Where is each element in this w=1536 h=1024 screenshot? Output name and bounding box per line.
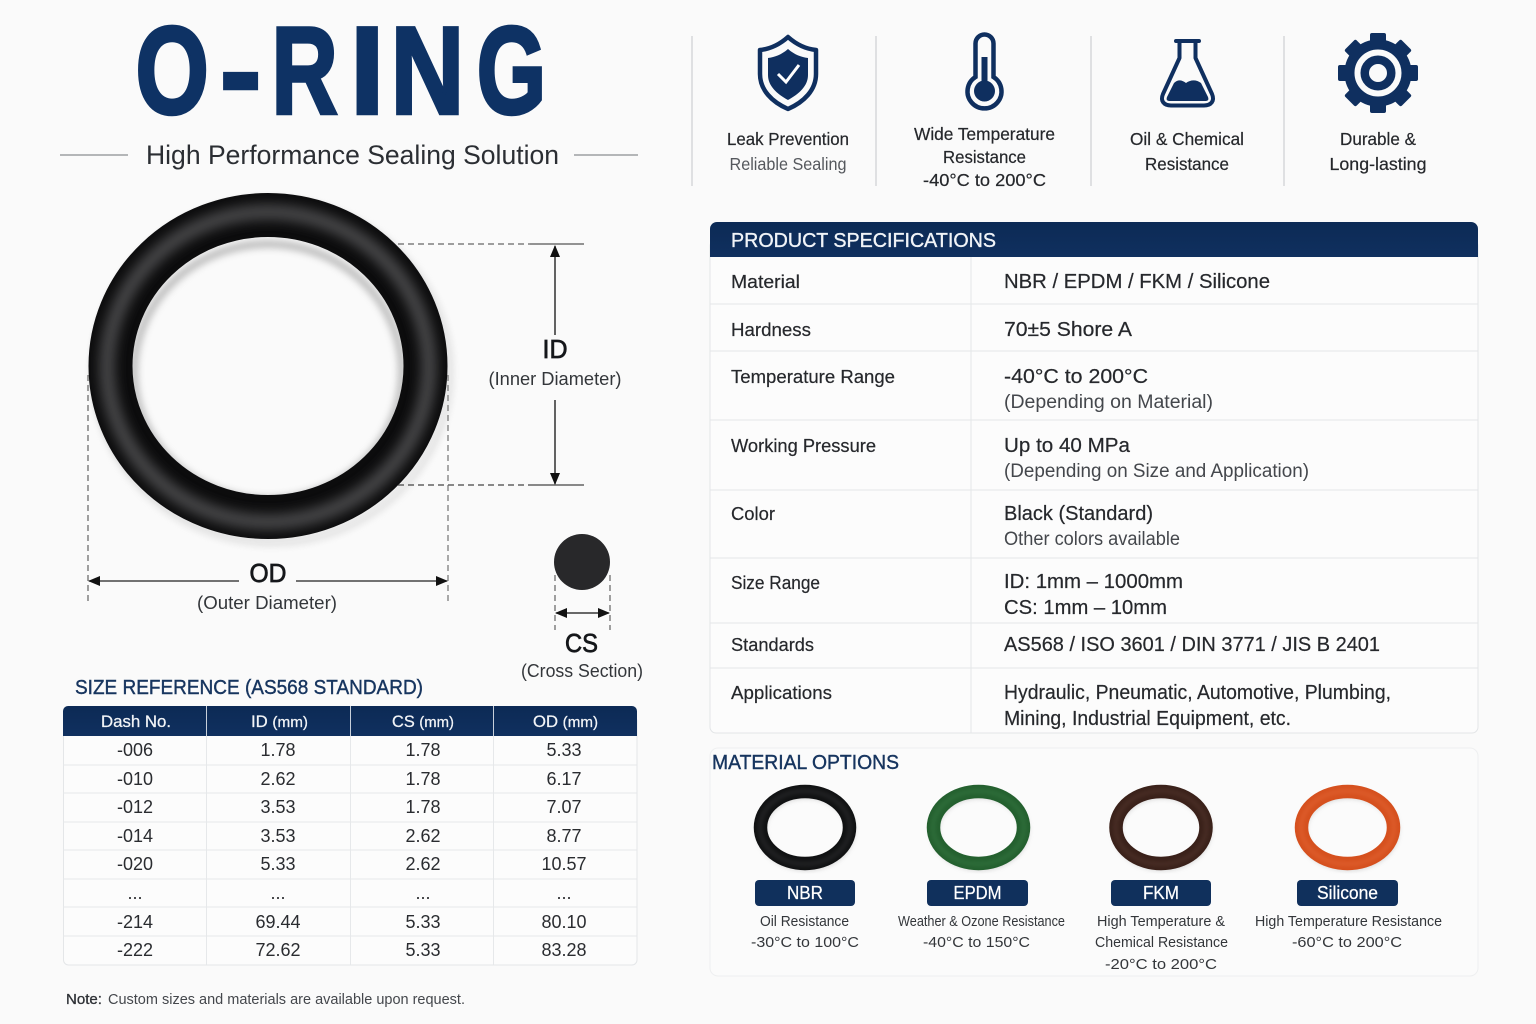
table rows: 2.62 bbox=[405, 854, 441, 874]
table rows: 8.77 bbox=[546, 826, 582, 846]
table rows: 6.17 bbox=[546, 769, 582, 789]
feature: oil and chemical bbox=[1130, 41, 1244, 174]
spec labels: Applications bbox=[731, 682, 832, 703]
feature: durable: Long-lasting bbox=[1330, 154, 1426, 174]
spec values: Up to 40 MPa bbox=[1004, 435, 1131, 457]
badge: Silicone: Silicone bbox=[1317, 883, 1378, 903]
table rows: ... bbox=[556, 883, 572, 903]
spec values: CS: 1mm – 10mm bbox=[1004, 597, 1167, 619]
table rows: 2.62 bbox=[260, 769, 296, 789]
spec labels: Color bbox=[731, 503, 775, 524]
title: N bbox=[391, 2, 464, 141]
table header: Dash No. bbox=[101, 713, 171, 731]
table rows: 5.33 bbox=[405, 940, 441, 960]
ring: EPDM bbox=[933, 791, 1024, 866]
material: EPDM: Weather & Ozone Resistance bbox=[898, 913, 1065, 930]
ID dimension bbox=[398, 244, 622, 485]
spec labels: Size Range bbox=[731, 572, 820, 593]
table rows: 80.10 bbox=[541, 912, 587, 932]
feature: leak prevention: Reliable Sealing bbox=[730, 154, 846, 174]
spec values: ID: 1mm – 1000mm bbox=[1004, 571, 1183, 593]
table rows: 69.44 bbox=[255, 912, 301, 932]
feature: wide temperature: -40°C to 200°C bbox=[923, 170, 1046, 190]
table rows: 3.53 bbox=[260, 797, 296, 817]
CS cross section bbox=[521, 534, 643, 681]
table rows bbox=[117, 740, 587, 960]
badge: FKM bbox=[1111, 880, 1211, 906]
spec labels: Standards bbox=[731, 634, 814, 655]
feature: wide temperature bbox=[914, 34, 1055, 190]
panel: material options bbox=[710, 748, 1478, 976]
material: Silicone: High Temperature Resistance bbox=[1255, 913, 1442, 930]
O-ring dimension diagram bbox=[88, 201, 643, 681]
spec labels: Working Pressure bbox=[731, 435, 876, 456]
material: FKM: Chemical Resistance bbox=[1095, 934, 1228, 951]
spec values: -40°C to 200°C bbox=[1004, 366, 1148, 388]
feature: durable bbox=[1330, 33, 1426, 174]
table rows: -012 bbox=[117, 797, 153, 817]
badge: Silicone bbox=[1297, 880, 1398, 906]
badge: NBR: NBR bbox=[787, 883, 823, 903]
title: I bbox=[350, 2, 384, 140]
spec values: (Depending on Size and Application) bbox=[1004, 461, 1309, 482]
badge: EPDM: EPDM bbox=[954, 883, 1002, 903]
material: NBR: -30°C to 100°C bbox=[751, 934, 859, 951]
spec values: NBR / EPDM / FKM / Silicone bbox=[1004, 271, 1270, 293]
CS cross section: (Cross Section) bbox=[521, 661, 643, 681]
spec values: AS568 / ISO 3601 / DIN 3771 / JIS B 2401 bbox=[1004, 634, 1380, 656]
panel: feature icons bbox=[692, 33, 1426, 190]
spec values bbox=[1004, 271, 1391, 730]
table rows: 7.07 bbox=[546, 797, 582, 817]
subtitle: High Performance Sealing Solution bbox=[146, 140, 559, 170]
spec values: Other colors available bbox=[1004, 529, 1180, 550]
icon: shield bbox=[760, 37, 816, 109]
feature: oil and chemical: Oil & Chemical bbox=[1130, 129, 1244, 149]
table header: CS (mm) bbox=[392, 713, 454, 731]
table rows: 2.62 bbox=[405, 826, 441, 846]
feature: wide temperature: Resistance bbox=[943, 147, 1026, 167]
table rows: 83.28 bbox=[541, 940, 587, 960]
table header bbox=[101, 713, 598, 731]
table rows: 5.33 bbox=[260, 854, 296, 874]
table rows: ... bbox=[415, 883, 431, 903]
feature: leak prevention: Leak Prevention bbox=[727, 129, 849, 149]
icon: flask bbox=[1162, 41, 1213, 106]
table rows: -014 bbox=[117, 826, 153, 846]
table rows: -020 bbox=[117, 854, 153, 874]
OD dimension bbox=[88, 375, 448, 613]
material: EPDM: -40°C to 150°C bbox=[923, 934, 1030, 951]
icon: gear bbox=[1338, 33, 1418, 113]
ring: NBR bbox=[760, 791, 850, 866]
table header: ID (mm) bbox=[251, 713, 308, 731]
table rows: -214 bbox=[117, 912, 153, 932]
title: O bbox=[136, 2, 209, 141]
material: NBR bbox=[751, 791, 859, 951]
note: Note: bbox=[66, 992, 102, 1008]
spec values: (Depending on Material) bbox=[1004, 392, 1213, 413]
table rows: ... bbox=[127, 883, 143, 903]
heading: material options: MATERIAL OPTIONS bbox=[712, 752, 899, 774]
title bbox=[136, 1, 546, 141]
material: Silicone bbox=[1255, 791, 1442, 951]
ID dimension: ID bbox=[542, 334, 568, 364]
table rows: 5.33 bbox=[405, 912, 441, 932]
badge: NBR bbox=[755, 880, 855, 906]
table rows: -010 bbox=[117, 769, 153, 789]
ID dimension: (Inner Diameter) bbox=[488, 369, 622, 389]
table rows: ... bbox=[270, 883, 286, 903]
table rows: -006 bbox=[117, 740, 153, 760]
spec values: Hydraulic, Pneumatic, Automotive, Plumbing, bbox=[1004, 682, 1391, 704]
badge: EPDM bbox=[927, 880, 1028, 906]
OD dimension: OD bbox=[250, 558, 286, 588]
feature: wide temperature: Wide Temperature bbox=[914, 124, 1055, 144]
spec labels: Material bbox=[731, 271, 800, 292]
CS cross section: CS bbox=[565, 628, 598, 658]
spec labels: Temperature Range bbox=[731, 366, 895, 387]
table rows: 3.53 bbox=[260, 826, 296, 846]
table rows: 72.62 bbox=[255, 940, 301, 960]
material: NBR: Oil Resistance bbox=[760, 913, 849, 930]
spec values: Mining, Industrial Equipment, etc. bbox=[1004, 708, 1291, 730]
OD dimension: (Outer Diameter) bbox=[197, 593, 337, 613]
table rows: 1.78 bbox=[260, 740, 296, 760]
badge: FKM: FKM bbox=[1143, 883, 1179, 903]
table rows: 1.78 bbox=[405, 740, 441, 760]
table rows: 1.78 bbox=[405, 769, 441, 789]
note: Custom sizes and materials are available upon request. bbox=[108, 992, 465, 1008]
panel: product specifications bbox=[710, 222, 1478, 733]
feature: durable: Durable & bbox=[1340, 129, 1416, 149]
icon: thermometer bbox=[967, 34, 1002, 108]
table rows: 1.78 bbox=[405, 797, 441, 817]
table rows: 5.33 bbox=[546, 740, 582, 760]
title: G bbox=[477, 1, 546, 140]
ring: FKM bbox=[1116, 791, 1207, 866]
material: EPDM bbox=[898, 791, 1065, 951]
heading: size reference: SIZE REFERENCE (AS568 STANDARD) bbox=[75, 677, 423, 699]
table: size reference bbox=[63, 706, 637, 965]
spec labels bbox=[731, 271, 895, 703]
table rows: -222 bbox=[117, 940, 153, 960]
feature: leak prevention bbox=[727, 37, 849, 174]
material: FKM: High Temperature & bbox=[1097, 913, 1225, 930]
spec values: Black (Standard) bbox=[1004, 503, 1153, 525]
material: Silicone: -60°C to 200°C bbox=[1292, 934, 1402, 951]
specifications header: PRODUCT SPECIFICATIONS bbox=[731, 230, 996, 252]
specifications header bbox=[710, 222, 1478, 257]
main O-ring image bbox=[94, 201, 450, 543]
material: FKM: -20°C to 200°C bbox=[1105, 956, 1217, 973]
ring: Silicone bbox=[1301, 791, 1394, 866]
feature: oil and chemical: Resistance bbox=[1145, 154, 1229, 174]
material: FKM bbox=[1095, 791, 1228, 973]
table header: OD (mm) bbox=[533, 713, 598, 731]
spec values: 70±5 Shore A bbox=[1004, 319, 1133, 341]
title: R bbox=[272, 2, 338, 141]
table rows: 10.57 bbox=[541, 854, 587, 874]
title: - bbox=[220, 2, 261, 140]
spec labels: Hardness bbox=[731, 319, 811, 340]
